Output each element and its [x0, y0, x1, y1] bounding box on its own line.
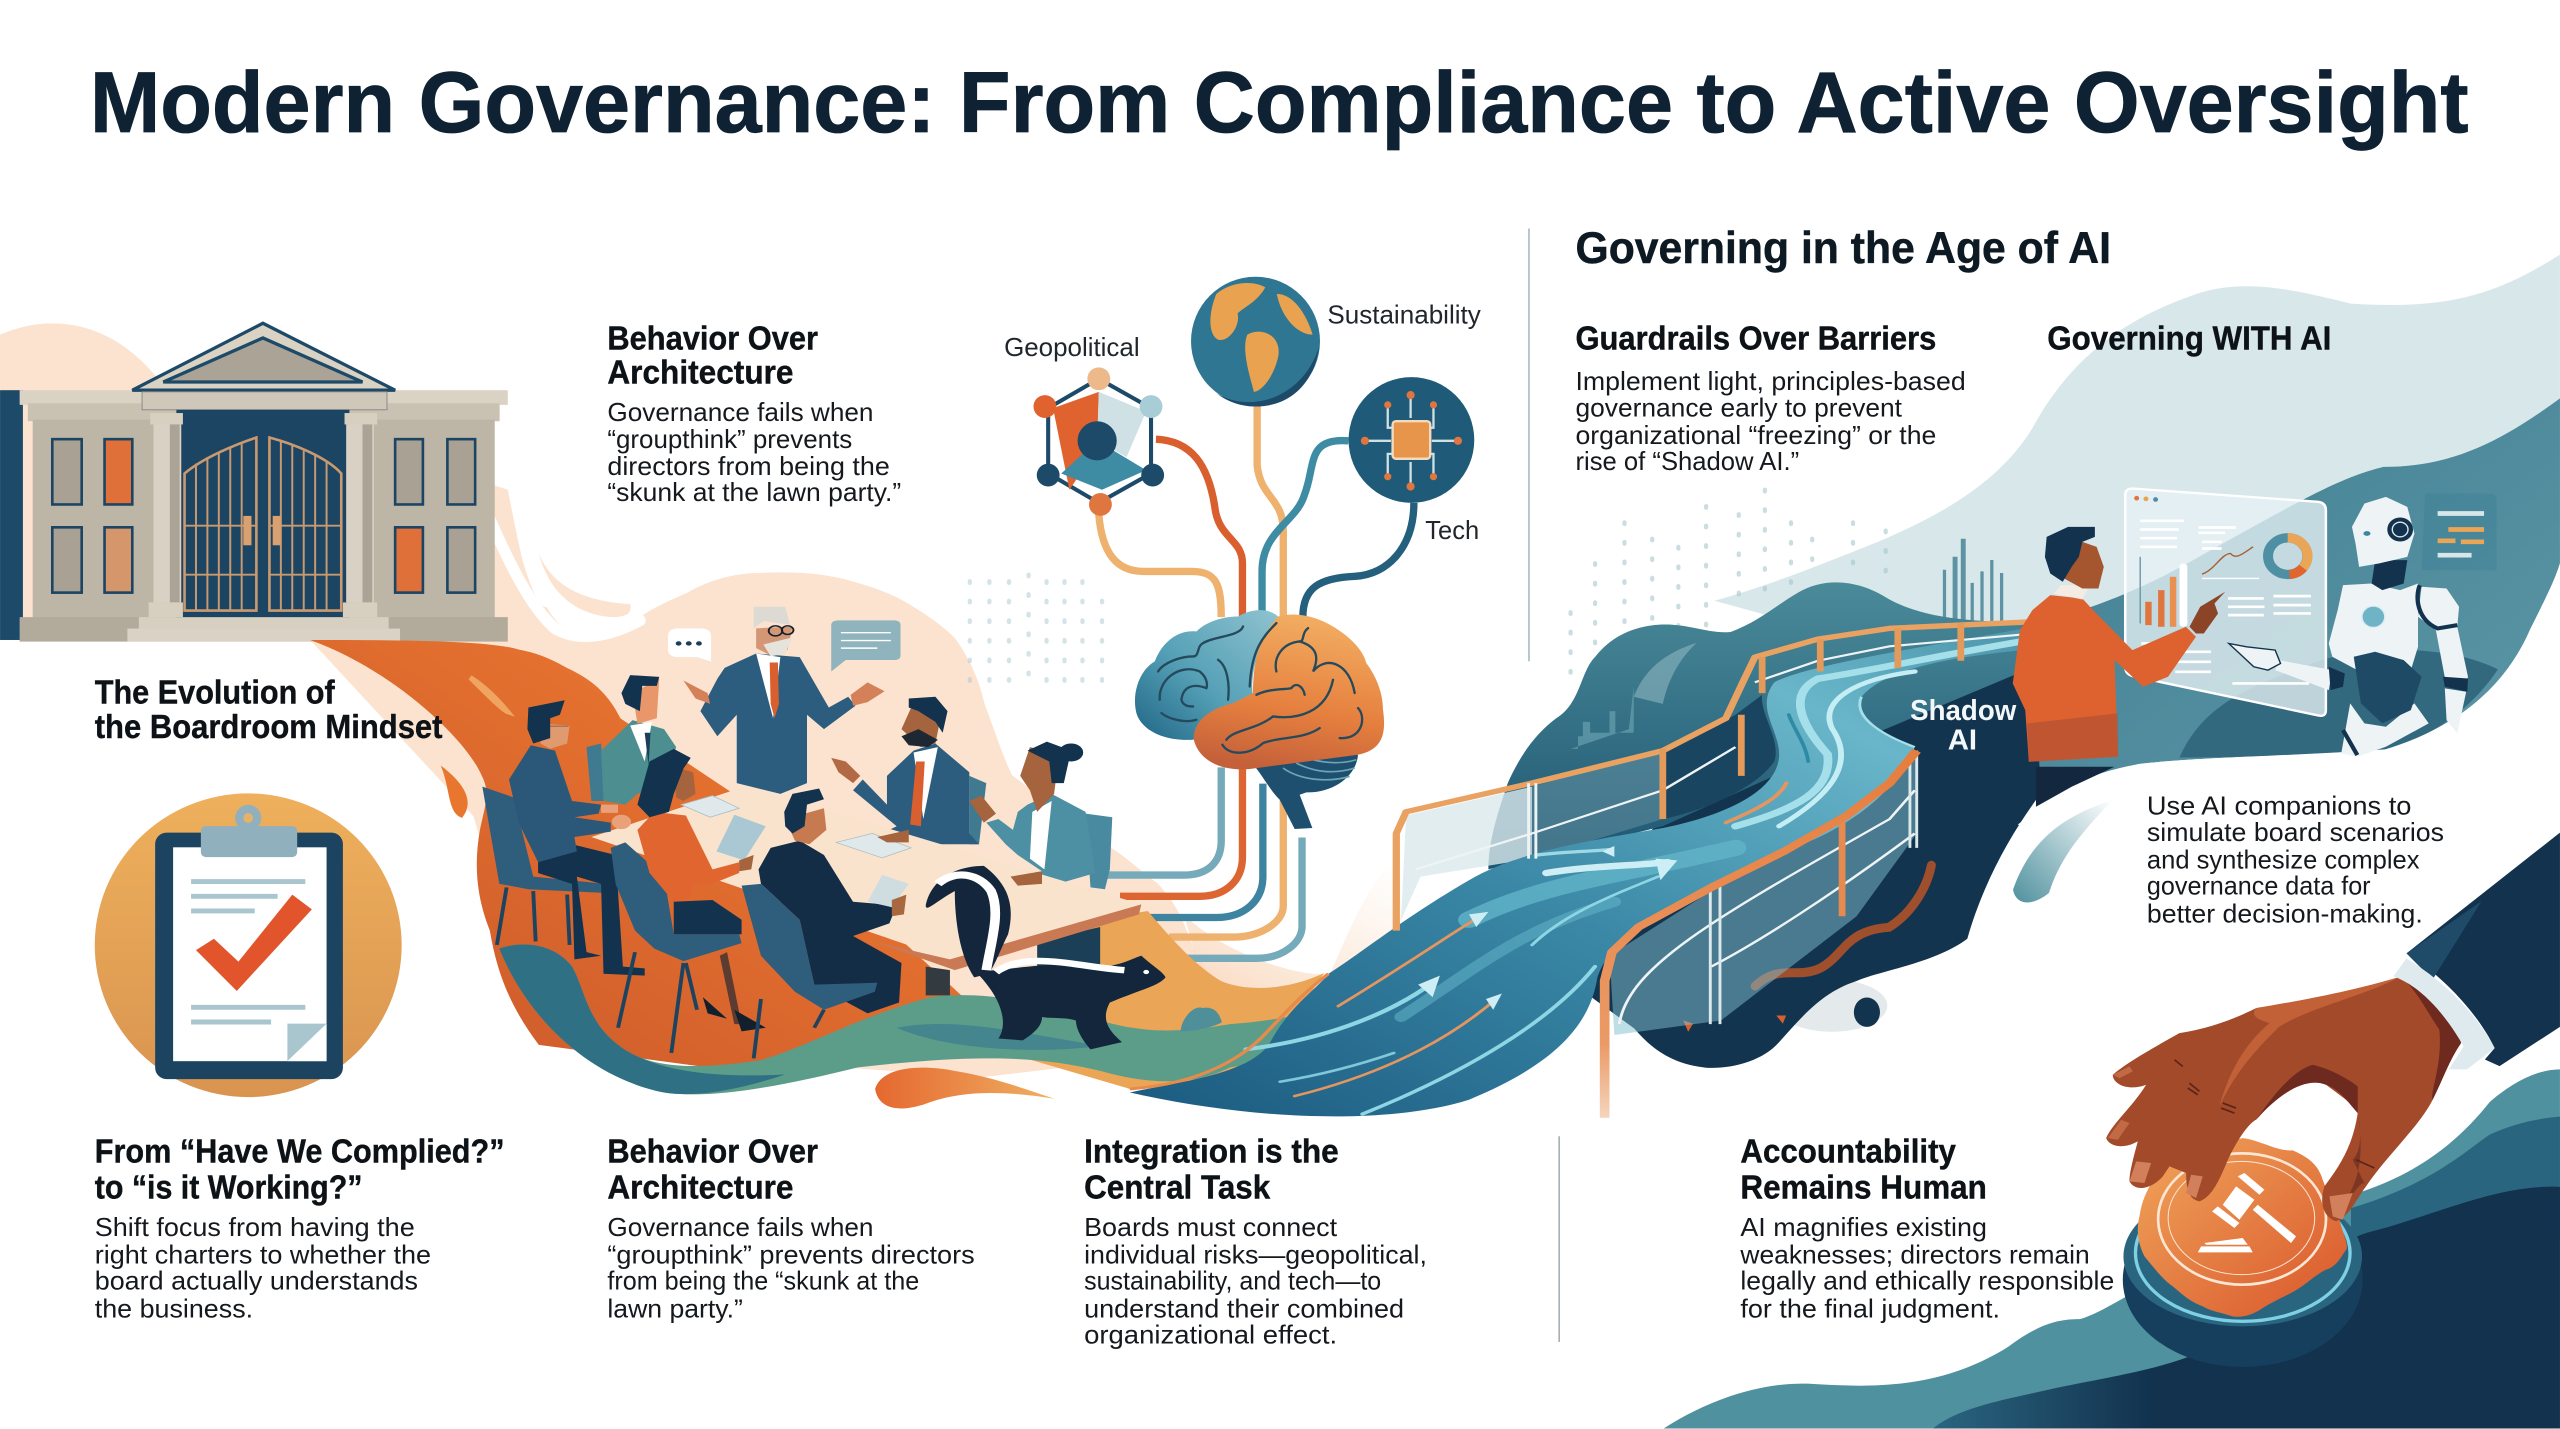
text block: Behavior Over Architecture, lower: Governance fails when	[607, 1212, 873, 1242]
icon: microchip, tech	[1349, 377, 1474, 503]
text block: Integration is the Central Task: sustainability, and tech—to	[1084, 1266, 1381, 1296]
illustration: hand reaching to the seal	[2106, 976, 2461, 1221]
illustration: orange flow under the boardroom	[310, 640, 980, 1078]
text block: Integration is the Central Task: Integration is the	[1084, 1133, 1339, 1170]
text block: Behavior Over Architecture, upper: “skunk at the lawn party.”	[607, 477, 901, 507]
text block: Behavior Over Architecture, lower: lawn party.”	[607, 1293, 743, 1323]
text block: Accountability Remains Human: Remains Human	[1740, 1169, 1987, 1206]
text block: Behavior Over Architecture, upper	[607, 320, 901, 507]
director: woman in orange	[611, 749, 766, 1053]
text block: Integration is the Central Task: organizational effect.	[1084, 1320, 1337, 1350]
text block: Behavior Over Architecture, lower: “groupthink” prevents directors	[607, 1240, 975, 1270]
text block: Guardrails Over Barriers: organizational “freezing” or the	[1575, 420, 1936, 450]
label: Shadow AI: Shadow	[1910, 695, 2017, 727]
title: Modern Governance: From Compliance to Active Oversight	[90, 55, 2469, 151]
label: Tech: Tech	[1425, 515, 1479, 545]
illustration: grey haze and dark dot	[1776, 980, 1887, 1032]
person: pointing man	[2013, 527, 2225, 807]
text block: Accountability Remains Human: AI magnifies existing	[1740, 1212, 1987, 1242]
label: Sustainability: Sustainability	[1327, 299, 1481, 329]
heading: The Evolution of the Boardroom Mindset: The Evolution of	[95, 675, 336, 712]
text block: From Have We Complied: to “is it Working?”	[95, 1169, 362, 1206]
icon: network node, geopolitical	[1033, 367, 1164, 516]
text block: Accountability Remains Human: legally and ethically responsible	[1740, 1266, 2114, 1296]
text block: Behavior Over Architecture, lower: Architecture	[607, 1169, 793, 1206]
director: standing chairman	[683, 607, 885, 794]
text block: Integration is the Central Task: Boards must connect	[1084, 1212, 1338, 1242]
director: foreground man	[742, 788, 909, 1058]
table with papers	[591, 786, 1141, 995]
text block: Use AI companions: governance data for	[2147, 871, 2371, 901]
illustration: peach background blob	[0, 323, 1404, 1078]
text block: Guardrails Over Barriers: Guardrails Over Barriers	[1575, 320, 1936, 357]
illustration: suit sleeve and cuff	[2393, 833, 2560, 1069]
text block: From Have We Complied: the business.	[95, 1293, 253, 1323]
text block: From Have We Complied: From “Have We Complied?”	[95, 1133, 505, 1170]
text block: Use AI companions: better decision-making.	[2147, 898, 2423, 928]
text block: Accountability Remains Human: for the final judgment.	[1740, 1293, 2000, 1323]
divider: accountability	[1558, 1136, 1560, 1342]
text block: Behavior Over Architecture, upper: Behavior Over	[607, 320, 818, 357]
text block: Integration is the Central Task: understand their combined	[1084, 1293, 1404, 1323]
director: bearded man	[831, 697, 986, 844]
pipes: risks feeding into the brain	[1099, 405, 1414, 617]
text block: Use AI companions	[2147, 791, 2444, 928]
text block: Behavior Over Architecture, lower: from being the “skunk at the	[607, 1266, 919, 1296]
heading: Governing in the Age of AI: Governing in the Age of AI	[1575, 224, 2111, 273]
icon: brain, blue and orange lobes	[1135, 610, 1384, 829]
illustration: boardroom scene with directors and table	[482, 607, 1141, 1058]
text block: Guardrails Over Barriers: governance early to prevent	[1575, 392, 1903, 422]
icon: seal button with gavel	[2123, 1138, 2363, 1367]
illustration: front guardrail	[1605, 751, 1917, 1118]
icon: globe, sustainability	[1191, 277, 1320, 407]
illustration: binary data dots near the boardroom	[970, 575, 1102, 692]
label: Shadow AI: AI	[1948, 724, 1977, 756]
screen: translucent dashboard	[2125, 489, 2326, 716]
text block: Behavior Over Architecture, upper: Architecture	[607, 355, 793, 392]
text block: Integration is the Central Task: individual risks—geopolitical,	[1084, 1240, 1427, 1270]
text block: Accountability Remains Human: weaknesses; directors remain	[1739, 1240, 2090, 1270]
text block: From Have We Complied: board actually understands	[95, 1266, 418, 1296]
text block: Behavior Over Architecture, upper: directors from being the	[607, 451, 890, 481]
robot	[2229, 494, 2497, 757]
director: far left	[482, 700, 645, 976]
director: woman at right	[969, 742, 1112, 889]
text block: Accountability Remains Human	[1739, 1133, 2114, 1323]
heading: Governing WITH AI: Governing WITH AI	[2047, 320, 2331, 357]
icon: classical building with gates	[0, 323, 508, 642]
text block: Behavior Over Architecture, lower	[607, 1133, 975, 1323]
text block: From Have We Complied	[95, 1133, 505, 1323]
speech bubbles	[668, 620, 901, 672]
text block: Guardrails Over Barriers	[1575, 320, 1966, 476]
icon: clipboard with check mark	[95, 793, 402, 1097]
divider: AI section	[1528, 229, 1530, 661]
text block: Behavior Over Architecture, lower: Behavior Over	[607, 1133, 818, 1170]
text block: Integration is the Central Task: Central Task	[1084, 1169, 1271, 1206]
illustration: dark terrain around the river	[1567, 629, 2041, 1068]
text block: Behavior Over Architecture, upper: Governance fails when	[607, 397, 873, 427]
text block: From Have We Complied: right charters to whether the	[95, 1240, 431, 1270]
illustration: bottom right teal waves	[1664, 1069, 2560, 1429]
illustration: man in orange blazer and dashboard	[2013, 489, 2497, 807]
text block: Integration is the Central Task	[1084, 1133, 1427, 1350]
pipes: from brain down to the table	[1105, 767, 1302, 958]
label: Geopolitical: Geopolitical	[1004, 332, 1140, 362]
label: Shadow AI	[1910, 695, 2017, 756]
director: back left in teal	[587, 675, 676, 805]
illustration: river flowing through guardrails	[1130, 582, 2031, 1116]
text block: Use AI companions: simulate board scenarios	[2147, 817, 2444, 847]
illustration: back guardrail	[1396, 622, 2031, 931]
text block: Use AI companions: and synthesize complex	[2147, 845, 2420, 875]
heading: The Evolution of the Boardroom Mindset: the Boardroom Mindset	[95, 709, 442, 746]
illustration: green and teal wave under the table	[499, 944, 1342, 1094]
text block: Guardrails Over Barriers: rise of “Shadow AI.”	[1575, 446, 1799, 476]
text block: Accountability Remains Human: Accountability	[1740, 1133, 1956, 1170]
illustration: pale hills behind the AI section	[1714, 255, 2560, 800]
text block: Use AI companions: Use AI companions to	[2147, 791, 2411, 821]
illustration: skunk	[926, 866, 1166, 1049]
text block: From Have We Complied: Shift focus from having the	[95, 1212, 415, 1242]
heading: The Evolution of the Boardroom Mindset	[95, 675, 442, 746]
text block: Behavior Over Architecture, upper: “groupthink” prevents	[607, 424, 852, 454]
text block: Guardrails Over Barriers: Implement light, principles-based	[1575, 366, 1966, 396]
illustration: data columns behind the river	[1571, 490, 1886, 691]
illustration: white curve and drop under AI panel	[2013, 563, 2560, 902]
illustration: golden field beside the table	[980, 911, 1324, 1089]
illustration: orange swoosh	[875, 1068, 1055, 1108]
